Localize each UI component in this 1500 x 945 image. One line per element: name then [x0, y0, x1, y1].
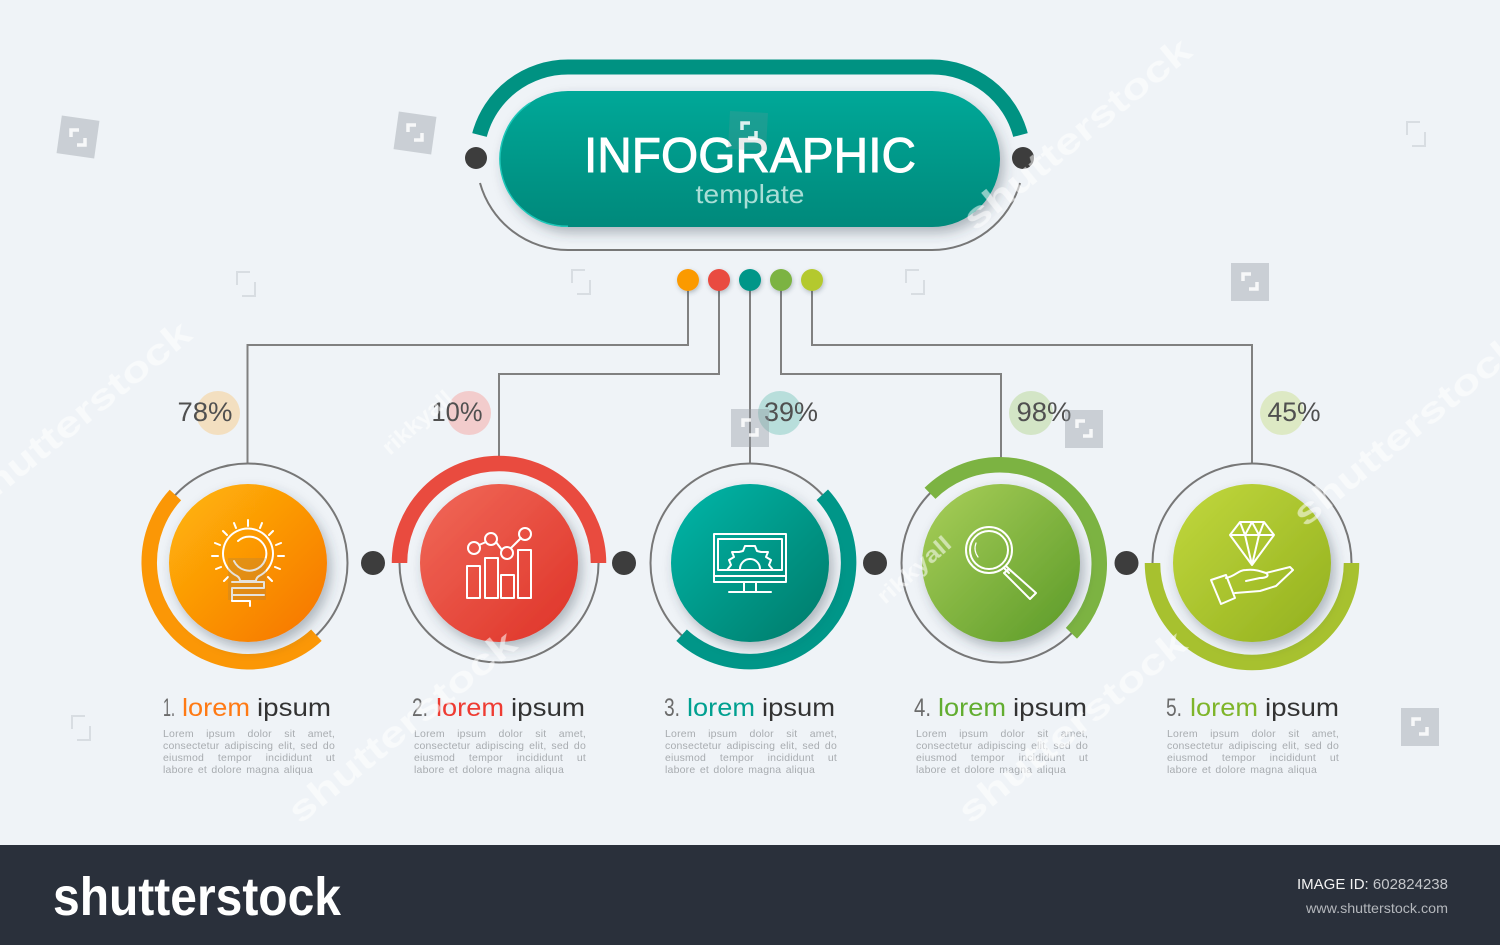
step 5 description: Lorem ipsum dolor sit amet,	[1167, 728, 1339, 740]
step 2 description: labore et dolore magna aliqua	[414, 764, 564, 776]
icon: hand holding diamond	[1211, 522, 1293, 604]
step 3 description: Lorem ipsum dolor sit amet,	[665, 728, 837, 740]
step 1 description: labore et dolore magna aliqua	[163, 764, 313, 776]
step 4 heading: ipsum	[1013, 694, 1087, 722]
step 3 heading: lorem	[687, 694, 755, 722]
title pill	[500, 91, 1000, 227]
thick progress arc	[149, 495, 316, 662]
step 5 heading	[1166, 694, 1339, 722]
percent badge 10%: 10%	[432, 397, 482, 427]
icon: light bulb	[212, 520, 284, 606]
panel: step 2	[392, 391, 606, 776]
step 1 heading: lorem	[182, 694, 250, 722]
watermark overlay: rikkyall	[872, 531, 956, 609]
thick progress arc	[930, 465, 1099, 633]
watermark overlay: shutterstock	[954, 28, 1200, 238]
step 3 heading	[664, 694, 835, 722]
separator dots between circles	[361, 551, 1138, 575]
header: infographic title badge	[465, 60, 1034, 251]
step 3 description: eiusmod tempor incididunt ut	[665, 752, 837, 764]
thin ring	[400, 464, 598, 662]
main circle	[922, 484, 1080, 642]
watermark overlay: shutterstock	[1284, 324, 1500, 534]
step 4 heading	[914, 694, 1087, 722]
step 3 description	[665, 728, 837, 776]
connector lines from colored dots to circles	[246, 290, 1253, 463]
header right dot	[1012, 147, 1034, 169]
dot: teal	[739, 269, 761, 291]
main circle	[169, 484, 327, 642]
step 5 heading: ipsum	[1265, 694, 1339, 722]
panel: step 1	[141, 391, 348, 776]
thick progress arc	[400, 464, 598, 563]
step 4 heading: lorem	[938, 694, 1006, 722]
step 5 description	[1167, 728, 1339, 776]
step 2 description: Lorem ipsum dolor sit amet,	[414, 728, 586, 740]
dot: orange	[677, 269, 699, 291]
panel: step 4	[900, 391, 1107, 776]
percent badge 45%: 45%	[1268, 397, 1320, 427]
percent badge 39%: 39%	[764, 397, 818, 427]
step 1 heading: ipsum	[257, 694, 331, 722]
icon: monitor with gear	[714, 534, 786, 592]
dot: green	[770, 269, 792, 291]
watermark overlay: shutterstock	[279, 621, 525, 831]
thick progress arc	[682, 495, 849, 662]
step 3 heading: ipsum	[762, 694, 835, 722]
step 2 heading: 2.	[412, 694, 428, 722]
step 5 heading: lorem	[1190, 694, 1258, 722]
step 1 description	[163, 728, 335, 776]
step 2 description: consectetur adipiscing elit, sed do	[414, 740, 586, 752]
title text: INFOGRAPHIC	[584, 129, 916, 183]
footer bar	[0, 845, 1500, 945]
percent badge 78%	[178, 391, 240, 435]
step 4 description: eiusmod tempor incididunt ut	[916, 752, 1088, 764]
step 4 heading: 4.	[914, 694, 931, 722]
header thin bottom arc	[480, 183, 1020, 250]
icon: bar chart with line	[467, 528, 531, 598]
step 3 description: labore et dolore magna aliqua	[665, 764, 815, 776]
step 5 description: labore et dolore magna aliqua	[1167, 764, 1317, 776]
header left dot	[465, 147, 487, 169]
thick progress arc	[1152, 563, 1352, 662]
step 1 description: eiusmod tempor incididunt ut	[163, 752, 335, 764]
thin ring	[650, 464, 850, 662]
step 5 description: consectetur adipiscing elit, sed do	[1167, 740, 1339, 752]
percent badge 98%	[1009, 391, 1072, 435]
step 4 description	[916, 728, 1088, 776]
step 5 heading: 5.	[1166, 694, 1182, 722]
header thick top arc	[480, 67, 1020, 135]
step 2 heading: lorem	[436, 694, 504, 722]
step 3 description: consectetur adipiscing elit, sed do	[665, 740, 837, 752]
step 1 description: consectetur adipiscing elit, sed do	[163, 740, 335, 752]
step 1 heading: 1.	[163, 694, 175, 722]
panel: step 5	[1144, 391, 1360, 776]
step 4 description: consectetur adipiscing elit, sed do	[916, 740, 1088, 752]
main circle	[420, 484, 578, 642]
five colored connector dots	[676, 268, 826, 296]
step 4 description: Lorem ipsum dolor sit amet,	[916, 728, 1088, 740]
watermark overlay: shutterstock	[949, 621, 1195, 831]
thin ring	[148, 464, 348, 662]
thin ring	[902, 464, 1100, 662]
thin ring	[1152, 464, 1352, 662]
panel: step 3	[650, 391, 856, 776]
step 2 heading: ipsum	[511, 694, 585, 722]
footer image id: IMAGE ID: 602824238	[1297, 876, 1448, 893]
step 1 description: Lorem ipsum dolor sit amet,	[163, 728, 335, 740]
subtitle text: template	[696, 179, 804, 209]
percent badge 39%	[758, 391, 818, 435]
step 2 description	[414, 728, 586, 776]
main circle	[1173, 484, 1331, 642]
percent badge 78%: 78%	[178, 397, 232, 427]
footer logo: shutterstock	[53, 867, 342, 927]
percent badge 98%: 98%	[1016, 397, 1072, 427]
step 2 description: eiusmod tempor incididunt ut	[414, 752, 586, 764]
step 1 heading	[163, 694, 331, 722]
step 5 description: eiusmod tempor incididunt ut	[1167, 752, 1339, 764]
watermark patch over bulb	[228, 558, 266, 600]
percent badge 45%	[1260, 391, 1320, 435]
step 4 description: labore et dolore magna aliqua	[916, 764, 1066, 776]
dot: lime	[801, 269, 823, 291]
watermark overlay: rikkyall	[377, 385, 457, 460]
percent badge 10%	[432, 391, 491, 435]
main circle	[671, 484, 829, 642]
icon: magnifying glass	[966, 527, 1036, 599]
footer website: www.shutterstock.com	[1305, 900, 1448, 916]
step 2 heading	[412, 694, 585, 722]
dot: red	[708, 269, 730, 291]
step 3 heading: 3.	[664, 694, 680, 722]
